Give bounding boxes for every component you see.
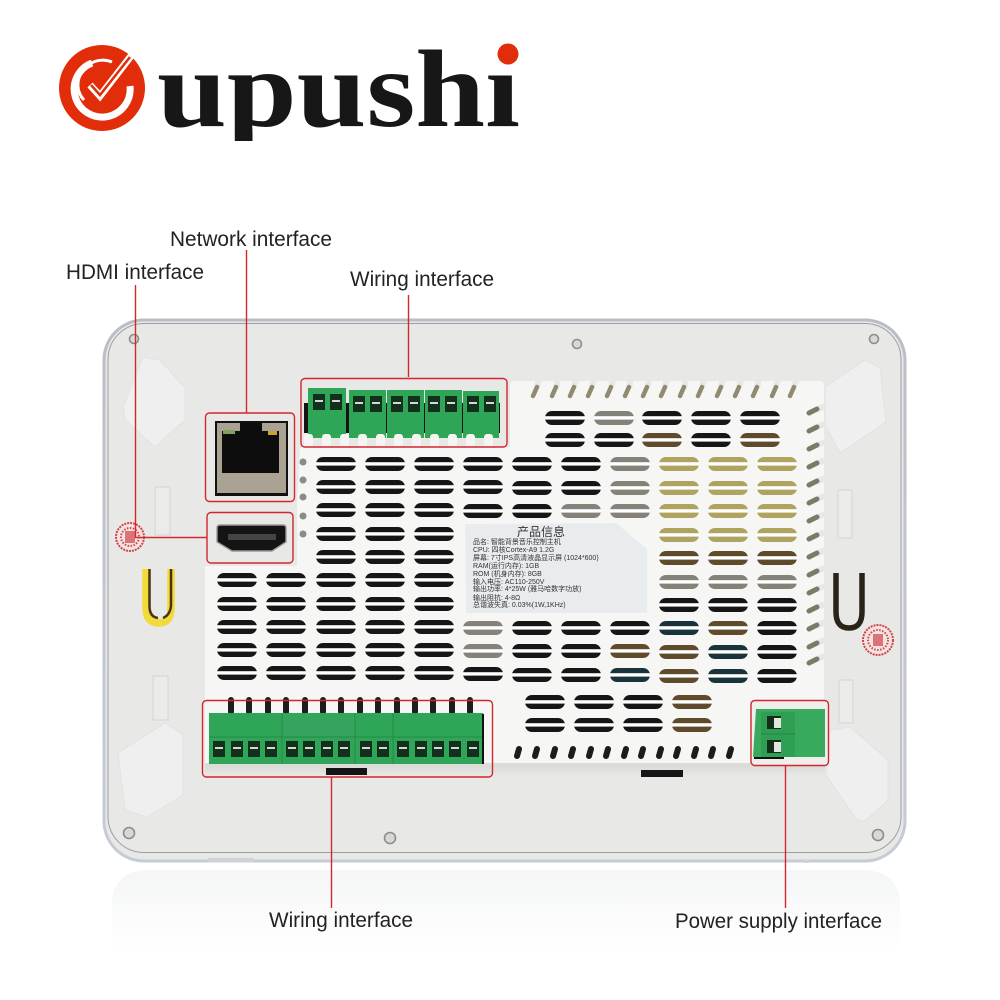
- power highlight box: [751, 700, 828, 766]
- label specs: [473, 537, 599, 609]
- bottom clips: [326, 768, 683, 777]
- label specs: 屏幕: 7寸IPS高清液晶显示屏 (1024*600): [473, 553, 599, 562]
- label specs: 总谐波失真: 0.03%(1W,1KHz): [473, 600, 566, 609]
- right fringe: [809, 409, 817, 663]
- callout: top wiring: [301, 268, 507, 447]
- corner recesses: [118, 357, 888, 821]
- slots upper block: [545, 411, 780, 447]
- network label: Network interface: [170, 228, 332, 251]
- logo: [59, 44, 518, 141]
- power leader line: [784, 765, 786, 908]
- hdmi highlight box: [207, 512, 293, 563]
- bottom wiring label: Wiring interface: [269, 909, 413, 932]
- device panel: [104, 320, 905, 863]
- label specs: CPU: 四核Cortex-A9 1.2G: [473, 545, 554, 554]
- network highlight box: [206, 413, 294, 502]
- bottom terminal block: [209, 700, 484, 764]
- network port: [215, 421, 288, 496]
- network leader line: [246, 250, 248, 413]
- callout: network: [170, 228, 332, 502]
- keyhole right: [836, 573, 862, 628]
- label specs: RAM(运行内存): 1GB: [473, 561, 539, 570]
- screws: [124, 334, 884, 844]
- bottom fringe: [517, 749, 731, 756]
- callout: power: [675, 700, 882, 933]
- label title: 产品信息: [517, 524, 565, 539]
- hdmi label: HDMI interface: [66, 261, 204, 284]
- bottom wiring highlight box: [202, 700, 492, 777]
- label specs: ROM (机身内存): 8GB: [473, 569, 542, 578]
- callout: hdmi: [66, 261, 293, 563]
- label plate: [465, 523, 647, 613]
- plate shadow: [205, 763, 825, 775]
- logo red dot: [498, 44, 518, 64]
- vented plate: [205, 381, 824, 765]
- label specs: 输入电压: AC110-250V: [473, 577, 545, 586]
- slots main grid: [217, 457, 797, 683]
- left fringe: [300, 458, 306, 538]
- top fringe notches: [537, 380, 796, 387]
- vent slots: [217, 411, 797, 732]
- label specs: 输出阻抗: 4-8Ω: [473, 593, 520, 602]
- hdmi leader line: [136, 285, 207, 538]
- product label: [465, 523, 647, 613]
- slots lower block: [525, 695, 712, 732]
- callout: bottom wiring: [202, 700, 492, 932]
- power label: Power supply interface: [675, 910, 882, 933]
- label specs: 输出功率: 4*25W (雅马哈数字功放): [473, 584, 582, 593]
- right fringe notches: [817, 406, 826, 659]
- power terminal: [751, 700, 828, 765]
- logo wordmark: upushi: [157, 28, 520, 150]
- top terminal block: [304, 388, 500, 447]
- bottom edge clips: [208, 858, 809, 863]
- logo mark: [59, 45, 145, 131]
- mounting slots: [153, 487, 853, 723]
- hdmi port: [217, 525, 286, 551]
- stamp left: [116, 523, 144, 551]
- top wiring label: Wiring interface: [350, 268, 494, 291]
- top wiring highlight box: [301, 378, 507, 447]
- keyhole left: [146, 569, 171, 623]
- logo dot mask: [486, 40, 516, 67]
- panel body: [104, 320, 905, 861]
- device reflection: [112, 870, 900, 950]
- top fringe: [533, 387, 794, 396]
- stamp right: [863, 625, 893, 655]
- label specs: 品名: 智能背景音乐控制主机: [473, 537, 561, 546]
- top wiring leader line: [408, 295, 410, 377]
- panel inner edge: [108, 324, 901, 852]
- terminal pins: [231, 700, 470, 712]
- bottom wiring leader line: [330, 777, 332, 908]
